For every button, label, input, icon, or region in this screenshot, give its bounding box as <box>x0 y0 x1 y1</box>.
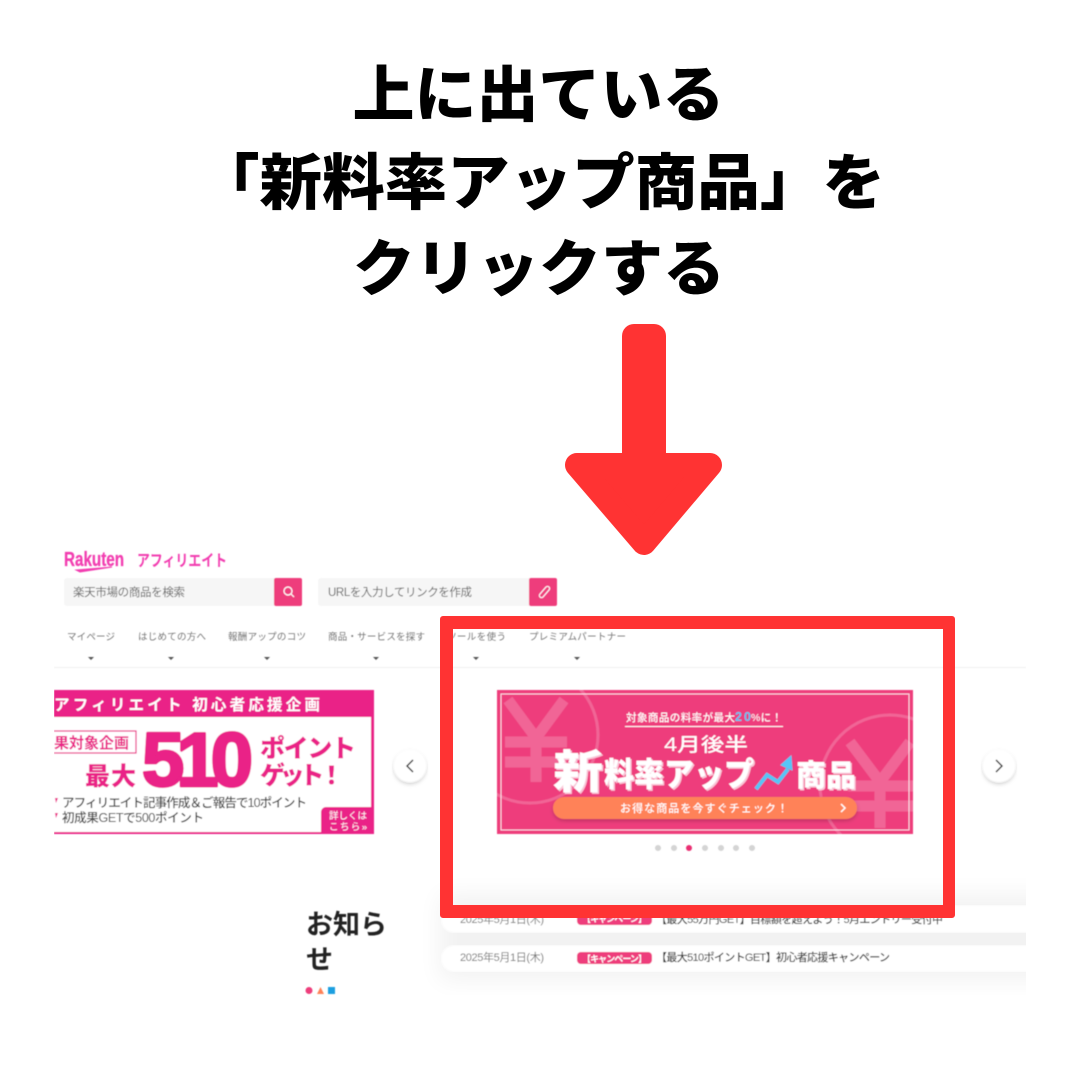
news row 1: 【キャンペーン】 <box>582 914 647 924</box>
red down arrow <box>577 324 710 543</box>
carousel dots <box>655 845 755 851</box>
banner: new rate up products: 4月後半 <box>664 734 748 756</box>
banner: beginner campaign: アフィリエイト 初心者応援企画 <box>54 695 320 714</box>
banner: beginner campaign: 最大 <box>85 763 136 791</box>
banner: new rate up products: %に！ <box>751 712 782 724</box>
banner: beginner campaign: 初成果GETで500ポイント <box>62 810 204 825</box>
logo <box>64 549 227 572</box>
carousel arrow left <box>394 750 426 782</box>
news heading <box>306 910 387 975</box>
banner: new rate up products: 料率アップ <box>604 756 754 793</box>
news row 1: 【最大55万円GET】目標額を超えよう！5月エントリー受付中 <box>656 912 943 926</box>
navigation menu: プレミアムパートナー <box>529 632 626 643</box>
news row 2: 2025年5月1日(木) <box>460 950 544 964</box>
navigation menu: 報酬アップのコツ <box>228 632 306 643</box>
navigation menu: はじめての方へ <box>138 631 206 643</box>
decorative yen coins <box>496 690 914 834</box>
news row 2: 【最大510ポイントGET】初心者応援キャンペーン <box>656 950 890 964</box>
banner: new rate up products: 商品 <box>796 760 856 793</box>
news row 1: 2025年5月1日(木) <box>460 912 544 926</box>
title <box>197 61 885 303</box>
orange button <box>553 797 857 819</box>
banner: beginner campaign: 510 <box>142 718 253 803</box>
search box: products: 楽天市場の商品を検索 <box>73 585 185 599</box>
banner: new rate up products: 対象商品の料率が最大 <box>626 711 736 724</box>
banner: new rate up products: 20 <box>735 710 751 724</box>
search box: link: URLを入力してリンクを作成 <box>328 586 472 599</box>
navigation menu: ツールを使う <box>447 631 506 643</box>
icon: magnifier <box>284 587 294 597</box>
navigation menu: 商品・サービスを探す <box>328 631 425 643</box>
news list shadow <box>444 900 1026 976</box>
banner: beginner campaign: ゲット！ <box>260 761 344 790</box>
banner: beginner campaign <box>40 690 374 834</box>
banner: beginner campaign: こちら» <box>329 822 367 833</box>
news heading: お知ら <box>306 910 387 940</box>
icon: link <box>539 586 550 598</box>
search box: products <box>64 578 302 606</box>
banner: beginner campaign: 詳しくは <box>329 810 367 822</box>
news heading: せ <box>306 945 333 975</box>
news row 2 <box>442 946 1062 971</box>
logo: アフィリエイト <box>137 553 227 570</box>
navigation menu: マイページ <box>67 632 115 643</box>
screenshot: affiliate site <box>40 549 1080 994</box>
banner: new rate up products: お得な商品を今すぐチェック！ <box>620 801 788 815</box>
navigation menu <box>67 631 626 660</box>
banner: beginner campaign: 果対象企画 <box>54 734 129 752</box>
banner: new rate up products <box>496 689 914 835</box>
title: 「新料率アップ商品」を <box>197 149 885 217</box>
news heading marks <box>306 987 335 994</box>
banner: beginner campaign: ポイント <box>260 735 356 763</box>
news row 1 <box>442 906 1062 932</box>
title: クリックする <box>353 235 725 303</box>
red highlight frame <box>440 616 955 918</box>
icon: rising arrow <box>756 756 792 789</box>
title: 上に出ている <box>352 61 724 129</box>
news row 2: 【キャンペーン】 <box>582 954 647 964</box>
search box: link <box>318 578 557 606</box>
carousel arrow right <box>983 750 1015 782</box>
banner: new rate up products: 新 <box>553 746 603 798</box>
banner: beginner campaign: アフィリエイト記事作成＆ご報告で10ポイント <box>62 795 307 810</box>
logo: Rakuten <box>64 549 124 571</box>
